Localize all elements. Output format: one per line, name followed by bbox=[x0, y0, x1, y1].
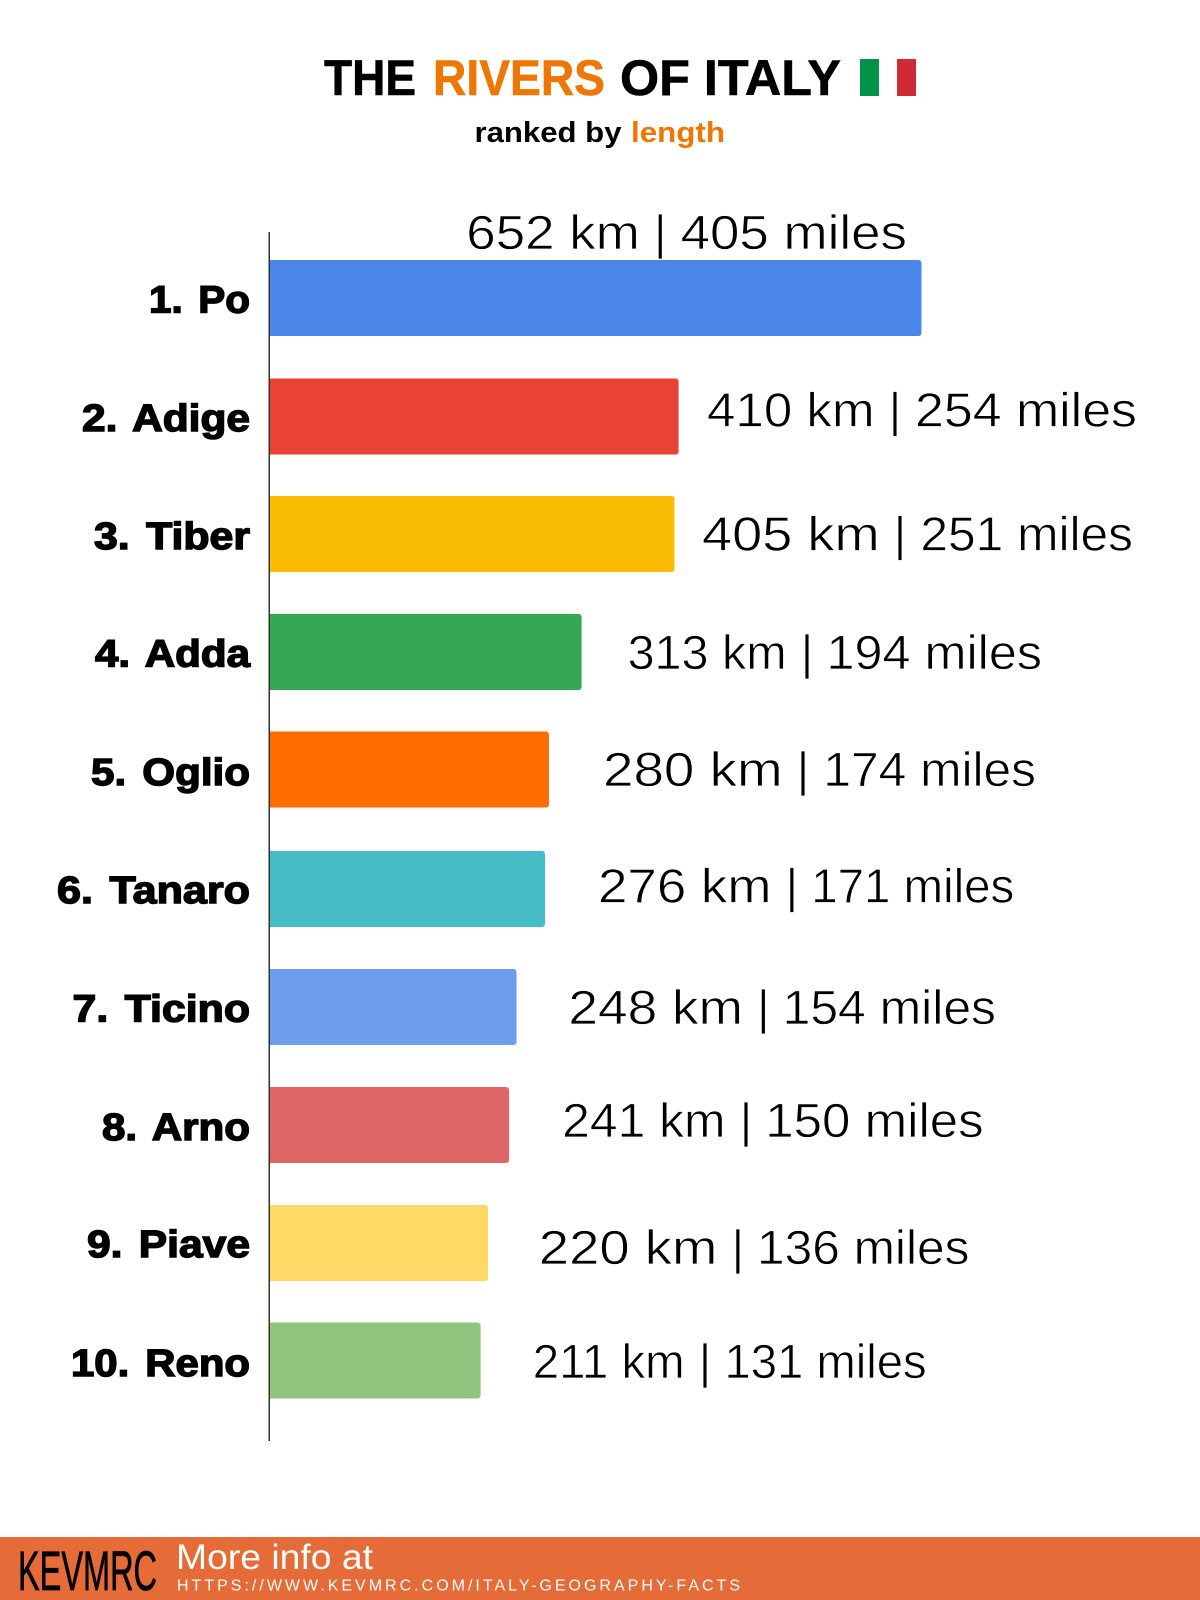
value: Arno: | bbox=[740, 1095, 752, 1148]
row: Tiber: 3. Tiber bbox=[94, 516, 250, 558]
footer url: HTTPS://WWW.KEVMRC.COM/ITALY-GEOGRAPHY-FACTS bbox=[177, 1578, 740, 1594]
value: Oglio: | bbox=[797, 744, 809, 797]
value: Adda: 194 miles bbox=[826, 627, 1042, 680]
value: Oglio: 174 miles bbox=[823, 744, 1036, 797]
value: Adda bbox=[628, 627, 1042, 680]
value: Adige: 254 miles bbox=[915, 384, 1137, 438]
value: Po: 652 km bbox=[466, 207, 640, 260]
row: Tanaro bbox=[57, 851, 1014, 927]
row: Piave: 9. Piave bbox=[87, 1224, 250, 1266]
value: Tanaro: 171 miles bbox=[811, 860, 1014, 914]
row: Oglio: 5. Oglio bbox=[91, 752, 250, 794]
subtitle bbox=[474, 117, 725, 149]
row: Adige: 2. Adige bbox=[82, 398, 250, 440]
title: THE bbox=[324, 50, 416, 106]
title bbox=[324, 50, 841, 106]
row: Tanaro: 6. Tanaro bbox=[57, 870, 250, 912]
row: Tiber bbox=[94, 496, 1133, 572]
value: Ticino: 154 miles bbox=[783, 982, 996, 1035]
value: Piave: 136 miles bbox=[757, 1222, 969, 1275]
value: Arno bbox=[562, 1095, 984, 1148]
row: Po: 1. Po bbox=[149, 280, 250, 322]
value: Reno bbox=[533, 1336, 927, 1389]
row: Arno: 8. Arno bbox=[102, 1107, 250, 1149]
icon: Italian flag bbox=[860, 59, 916, 96]
value: Piave bbox=[539, 1222, 969, 1275]
value: Arno: 150 miles bbox=[765, 1095, 984, 1148]
value: Tanaro: | bbox=[786, 860, 798, 914]
value: Tiber: 405 km bbox=[702, 508, 880, 562]
row: Oglio bbox=[91, 732, 1036, 808]
footer banner bbox=[0, 1537, 1200, 1600]
row: Adda: 4. Adda bbox=[95, 634, 251, 676]
value: Tiber bbox=[702, 508, 1133, 562]
value: Ticino bbox=[568, 982, 996, 1035]
value: Reno: 211 km bbox=[533, 1336, 685, 1389]
value: Reno: | bbox=[699, 1336, 711, 1389]
value: Adda: | bbox=[801, 627, 813, 680]
value: Tiber: | bbox=[894, 508, 906, 562]
row: Piave bbox=[87, 1205, 969, 1281]
footer heading: More info at bbox=[176, 1538, 373, 1577]
title: OF ITALY bbox=[620, 50, 841, 106]
value: Oglio: 280 km bbox=[603, 744, 783, 797]
value: Po: 405 miles bbox=[681, 207, 907, 260]
value: Tanaro: 276 km bbox=[598, 860, 771, 914]
value: Adige: | bbox=[889, 384, 901, 438]
value: Ticino: 248 km bbox=[568, 982, 743, 1035]
value: Adige bbox=[707, 384, 1137, 438]
row: Reno: 10. Reno bbox=[71, 1343, 250, 1385]
value: Po: | bbox=[654, 207, 666, 260]
row: Po bbox=[149, 207, 922, 336]
axis line bbox=[268, 232, 270, 1441]
value: Tanaro bbox=[598, 860, 1014, 914]
value: Piave: | bbox=[732, 1222, 744, 1275]
value: Arno: 241 km bbox=[562, 1095, 726, 1148]
value: Oglio bbox=[603, 744, 1036, 797]
value: Piave: 220 km bbox=[539, 1222, 717, 1275]
row: Arno bbox=[102, 1087, 984, 1163]
subtitle: ranked by bbox=[474, 117, 622, 149]
row: Reno bbox=[71, 1322, 927, 1398]
value: Reno: 131 miles bbox=[724, 1336, 927, 1389]
value: Tiber: 251 miles bbox=[920, 508, 1133, 562]
row: Adda bbox=[95, 614, 1042, 690]
subtitle: length bbox=[631, 117, 725, 149]
row: Ticino: 7. Ticino bbox=[72, 989, 250, 1031]
row: Ticino bbox=[72, 969, 996, 1045]
value: Adda: 313 km bbox=[628, 627, 787, 680]
row: Adige bbox=[82, 378, 1137, 454]
value: Po bbox=[466, 207, 907, 260]
value: Adige: 410 km bbox=[707, 384, 874, 438]
bar chart bbox=[57, 207, 1137, 1441]
value: Ticino: | bbox=[757, 982, 770, 1035]
title: RIVERS bbox=[433, 50, 605, 106]
